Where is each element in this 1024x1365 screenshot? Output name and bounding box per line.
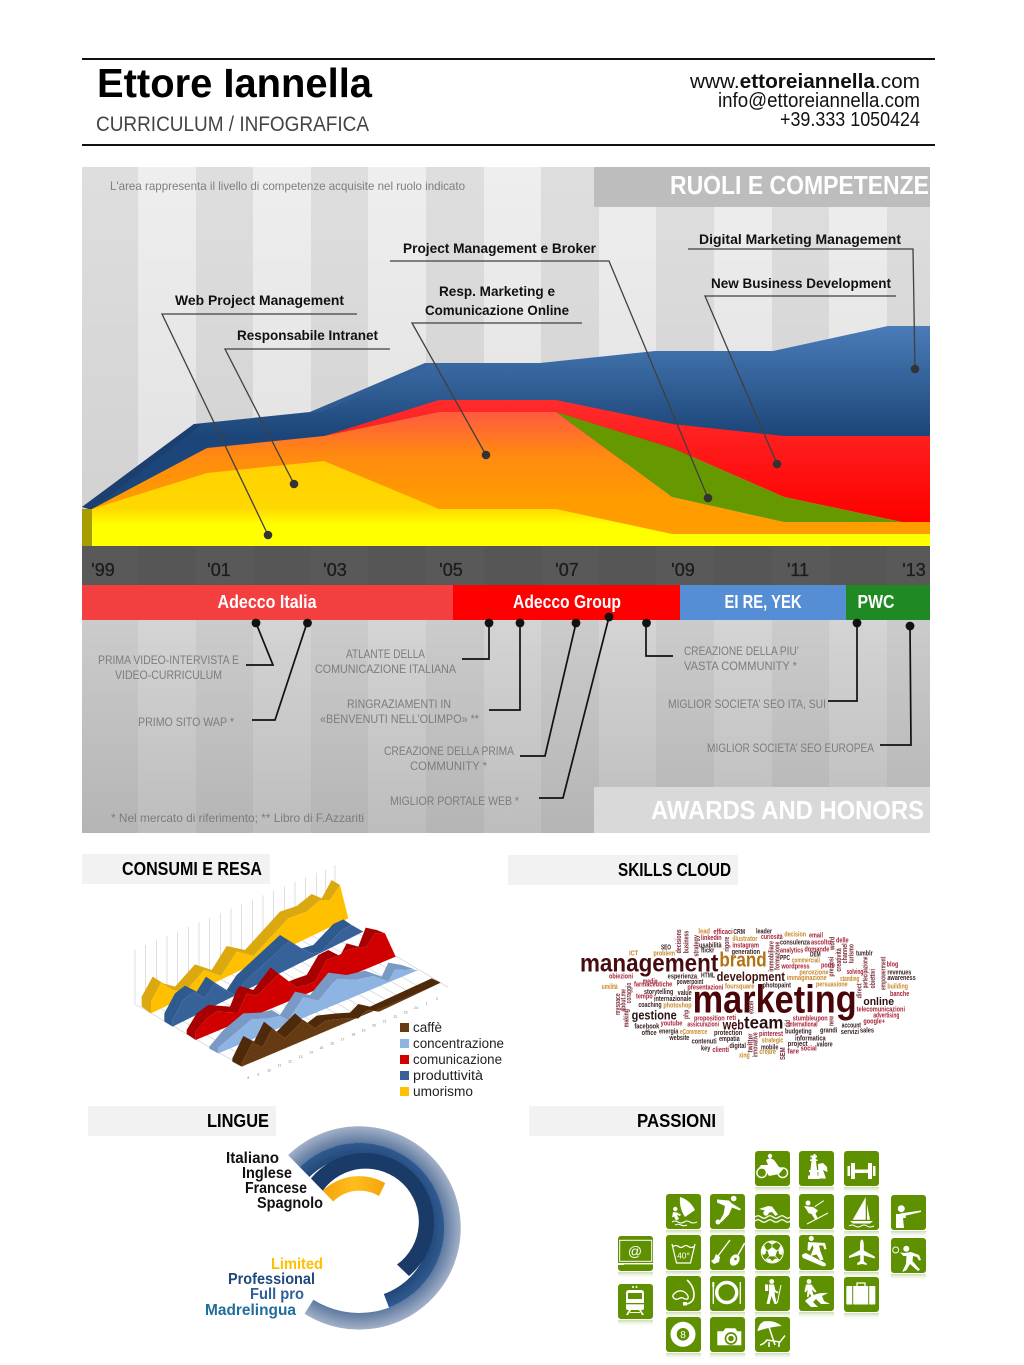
axis hours: 13 [299,1055,303,1059]
3d ribbon chart [135,865,448,1080]
award labels: * Nel mercato di riferimento; ** Libro di F.Azzariti [111,811,364,825]
icon: laptop at: @ [628,1243,642,1259]
role label: web project management: Web Project Management [175,292,344,308]
word cloud: servizi [841,1029,859,1036]
role label: new business development: New Business Development [711,275,891,291]
word cloud: myspace [615,993,622,1015]
word cloud: xing [739,1052,750,1059]
award labels: MIGLIOR SOCIETA’ SEO ITA, SUI [668,697,826,711]
role label: resp marketing: Comunicazione Online [425,302,569,318]
icon: chess [799,1151,834,1194]
icon: beach umbrella [755,1317,790,1360]
word cloud: value [678,990,692,997]
word cloud: gestione [632,1008,677,1022]
word cloud: empatia [719,1036,740,1043]
word cloud: digital [729,1043,746,1050]
word cloud: email [809,933,823,940]
subtitle: CURRICULUM / INFOGRAFICA [96,113,369,136]
word cloud: strategic [762,1038,783,1045]
role label: responsabile intranet [225,327,390,488]
word cloud: budgeting [785,1028,812,1035]
word cloud: tumblr [856,950,873,957]
heading: skills cloud: SKILLS CLOUD [618,860,731,880]
legend: caffè [413,1020,442,1035]
icon: guitars [710,1235,745,1278]
section title: awards and honors [594,787,930,833]
word cloud: linkedin [701,935,722,942]
word cloud: international [788,1022,818,1029]
axis hours: 10 [267,1068,271,1072]
word cloud: CRM [733,929,745,936]
language names: Francese [245,1180,307,1197]
word cloud: generation [732,949,760,956]
word cloud: esperienza [668,973,697,980]
word cloud: presentazioni [687,984,723,991]
word cloud: domande [804,947,829,954]
word cloud: persuasione [816,982,848,989]
axis hours: 8 [247,1076,249,1080]
heading: skills cloud [508,855,738,885]
word cloud: storytelling [644,989,673,996]
award labels: ATLANTE DELLA [346,647,425,661]
icon: windsurf [666,1194,701,1237]
word cloud: tempo [636,993,653,1000]
word cloud: photopaint [763,982,792,989]
timeline years: '03 [323,560,347,580]
word cloud: instagram [732,943,759,950]
word cloud: energia [659,1028,678,1035]
legend [400,1020,504,1099]
panel: skills cloud [508,855,916,1060]
role label: web project management [162,292,357,539]
panel: ruoli e competenze [82,167,930,546]
word cloud: social [801,1046,817,1053]
axis hours: 11 [278,1063,281,1067]
award labels: RINGRAZIAMENTI IN [347,697,451,711]
icon: football kick [710,1194,745,1237]
word cloud: valore [817,1042,833,1049]
panel: awards and honors [82,613,930,833]
heading: lingue [88,1106,276,1136]
word cloud: eCommerce [680,1029,707,1036]
award labels: MIGLIOR SOCIETA’ SEO EUROPEA [707,741,874,755]
word cloud: team [744,1012,783,1032]
word cloud: website [669,1035,689,1042]
word cloud: blog [887,962,898,969]
icon: billiard ball: 8 [680,1330,686,1341]
axis hours: 20 [372,1023,376,1027]
word cloud: efficaci [713,929,733,936]
word cloud: sales [860,1028,874,1035]
company ribbon [82,585,930,620]
word cloud: curiosità [761,934,783,941]
word cloud: empowerment [880,956,887,990]
word cloud: rigore [724,937,731,952]
award labels: COMUNICAZIONE ITALIANA [315,662,456,676]
icon: airplane [844,1236,879,1279]
word cloud: about.me [620,989,627,1012]
header [82,58,935,146]
heading: passioni: PASSIONI [637,1111,716,1131]
axis hours: 2 [436,997,438,1001]
word cloud [580,928,916,1060]
timeline years [82,546,930,585]
award labels: CREAZIONE DELLA PRIMA [384,744,514,758]
icon: camera [710,1317,745,1360]
word cloud: stumbleupon [793,1016,828,1023]
series: umorismo [142,880,348,1013]
word cloud: umilità [602,984,618,991]
series: concentrazione [209,963,418,1053]
word cloud: reti [727,1015,736,1022]
area chart [82,326,930,546]
language names [226,1150,323,1212]
heading: consumi e resa [82,854,270,884]
legend: umorismo [413,1084,473,1099]
word cloud: management [580,950,719,978]
word cloud: ascolto [811,939,831,946]
chart note: L'area rappresenta il livello di competenze acquisite nel ruolo indicato [110,179,465,193]
award labels: «BENVENUTI NELL’OLIMPO» ** [320,712,479,726]
timeline years: '05 [439,560,463,580]
axis hours: 14 [309,1050,313,1054]
proficiency legend: Full pro [250,1286,304,1303]
axis hours: 22 [393,1015,397,1019]
role label: responsabile intranet: Responsabile Intranet [237,327,378,343]
word cloud: word [829,937,836,951]
word cloud: web [722,1016,744,1032]
word cloud: facebook [634,1023,659,1030]
role label: project management e broker: Project Management e Broker [403,240,597,256]
word cloud: flickr [701,947,715,954]
contacts: info@ettoreiannella.com [718,90,920,112]
word cloud: channel [842,943,849,963]
word cloud: contenuti [692,1038,717,1045]
timeline years: '13 [902,560,926,580]
word cloud: DEM [810,952,821,959]
word cloud: development [717,969,785,984]
timeline years: '09 [671,560,695,580]
axis hours: 16 [330,1042,334,1046]
word cloud: standing [840,976,859,983]
word cloud: did [785,1020,792,1027]
axis hours: 23 [404,1011,408,1015]
icon: tennis [891,1238,926,1281]
icon: washing [666,1235,701,1278]
award labels: CREAZIONE DELLA PIU’ [684,644,799,658]
word cloud: photoshop [663,1002,692,1009]
language names: Spagnolo [257,1195,323,1212]
word cloud: problem [653,950,675,957]
word cloud: protection [714,1030,742,1037]
radial bar chart [288,1126,461,1330]
proficiency legend: Madrelingua [205,1302,296,1319]
icon: motorbike [755,1151,790,1194]
word cloud: marketing [693,978,857,1022]
word cloud: pinterest [759,1031,784,1038]
role label: digital marketing management [688,231,919,373]
timeline years: '07 [555,560,579,580]
company ribbon: Adecco Italia [218,592,317,612]
word cloud: ICT [629,951,639,958]
proficiency legend: Professional [228,1271,315,1288]
proficiency legend [205,1256,323,1319]
word cloud: business [683,931,690,953]
award connectors [246,613,914,798]
word cloud: fare [787,1048,799,1055]
word cloud: google+ [863,1019,885,1026]
icon: surf [799,1276,834,1319]
contacts: +39.333 1050424 [780,109,920,131]
word cloud: advertising [873,1013,899,1020]
panel: consumi e resa [82,854,504,1099]
word cloud: twitter [748,1033,755,1053]
award labels: VIDEO-CURRICULUM [115,668,222,682]
axis hours: 21 [383,1019,387,1023]
legend: comunicazione [413,1052,502,1067]
axis hours: 24 [414,1006,418,1010]
icon: train [618,1284,653,1327]
word cloud: decision [784,932,806,939]
award labels: VASTA COMMUNITY * [684,659,797,673]
word cloud: HTML [701,972,716,979]
word cloud: internazionale [654,996,691,1003]
word cloud: youtube [661,1020,682,1027]
contacts [689,71,920,131]
word cloud: creare [759,1049,776,1056]
word cloud: account [842,1022,861,1029]
word cloud: immobiliare [768,941,775,972]
timeline years: '01 [207,560,231,580]
word cloud: building [887,983,908,990]
word cloud: farmaceutiche [634,982,672,989]
word cloud: partecipazione [863,957,870,988]
icon: snowboard [799,1235,834,1278]
series: produttività [164,919,363,1027]
word cloud: telecomunicazioni [857,1007,905,1014]
word cloud: strategy [693,935,700,957]
word cloud: revenues [887,969,911,976]
icon: billiard ball [666,1317,701,1360]
word cloud: brand [719,950,767,972]
icon: hiking [755,1276,790,1319]
panel: passioni [529,1106,926,1360]
word cloud: powerpoint [677,979,704,986]
company ribbon: Adecco Group [513,592,621,612]
heading: consumi e resa: CONSUMI E RESA [122,859,262,879]
word cloud: mobile [761,1044,778,1051]
word cloud: innovative [752,1032,759,1057]
legend: concentrazione [413,1036,504,1051]
word cloud: leader [756,928,772,935]
word cloud: analytics [780,947,803,954]
word cloud: wordpress [781,964,810,971]
word cloud: office [642,1030,657,1037]
word cloud: SEM [780,1047,787,1060]
icon: dumbbell [844,1151,879,1194]
role label: digital marketing management: Digital Marketing Management [699,231,901,247]
word cloud: foursquare [725,983,754,990]
axis hours: 9 [257,1072,259,1076]
word cloud: lead [698,928,710,935]
word cloud: solving [847,969,863,976]
word cloud: creatività [836,948,843,972]
section title: awards and honors: AWARDS AND HONORS [651,795,924,825]
award labels: PRIMA VIDEO-INTERVISTA E [98,653,239,667]
section title: ruoli e competenze [594,167,930,207]
icon: laptop at [618,1236,653,1279]
timeline years: '11 [787,560,809,580]
word cloud: proposition [694,1016,725,1023]
panel: lingue [88,1106,461,1330]
proficiency legend: Limited [271,1256,323,1273]
award labels: COMMUNITY * [410,759,487,773]
section title: ruoli e competenze: RUOLI E COMPETENZE [670,170,929,200]
axis hours: 1 [426,1001,428,1005]
word cloud: direct [857,983,864,998]
award labels: PRIMO SITO WAP * [138,715,234,729]
role label: new business development [705,275,896,468]
word cloud: coaching [638,1002,662,1009]
axis hours [247,997,438,1080]
heading: passioni [529,1106,724,1136]
series: comunicazione [187,928,396,1040]
axis hours: 17 [341,1037,345,1041]
title: Ettore Iannella [97,60,373,106]
word cloud: obiezioni [609,973,633,980]
word cloud: project [788,1041,808,1048]
word cloud: awareness [887,975,916,982]
legend: produttività [413,1068,484,1083]
icon: shooter [891,1195,926,1238]
language names: Inglese [242,1165,292,1182]
word cloud: online [863,996,894,1008]
word cloud: consulenza [780,939,810,946]
role label: resp marketing [412,283,582,459]
word cloud: immaginazione [787,975,827,982]
icon: dining [710,1276,745,1319]
word cloud: excel [748,1001,755,1014]
word cloud: delle [836,937,849,944]
word cloud: key [701,1046,710,1053]
axis hours: 12 [288,1059,292,1063]
word cloud: informatica [795,1036,826,1043]
word cloud: coraggio [626,983,633,1003]
award labels [98,644,874,825]
timeline years: '99 [91,560,115,580]
word cloud: clienti [712,1047,729,1054]
icon: washing: 40° [677,1250,690,1260]
word cloud: illustrator [732,936,758,943]
word cloud: percezione [799,969,829,976]
axis hours: 18 [351,1033,355,1037]
award labels: MIGLIOR PORTALE WEB * [390,794,519,808]
word cloud: making [623,1009,630,1027]
icon: sailing [844,1195,879,1238]
word cloud: decisions [676,929,683,953]
language names: Italiano [226,1150,279,1167]
heading: lingue: LINGUE [207,1111,269,1131]
word cloud: php [683,1010,690,1019]
icon: football [755,1235,790,1278]
word cloud: usabilità [699,942,722,949]
axis hours: 15 [319,1046,323,1050]
role label: resp marketing: Resp. Marketing e [439,283,555,299]
icon: swimming [755,1194,790,1237]
icon: snorkel [666,1276,701,1319]
company ribbon: EI RE, YEK [724,592,802,612]
word cloud: banche [890,991,909,998]
axis hours: 19 [362,1028,366,1032]
word cloud: assicurazioni [687,1022,719,1029]
icon: ski [799,1194,834,1237]
word cloud: PPC [780,955,790,962]
role label: project management e broker [390,240,712,502]
series: caffè [232,978,441,1067]
word cloud: obiettivi [870,969,877,988]
word cloud: commerciali [792,958,820,965]
word cloud: formazione [774,942,781,970]
word cloud: new [828,1016,835,1026]
company ribbon: PWC [858,592,894,612]
word cloud: turismo [849,944,856,963]
word cloud: grandi [820,1028,837,1035]
word cloud: porre [821,963,835,970]
icon: suitcase [844,1277,879,1320]
word cloud: media [643,978,658,985]
word cloud: preziosi [829,957,836,977]
word cloud: SEO [661,944,671,951]
contacts: www.ettoreiannella .com [689,71,920,93]
